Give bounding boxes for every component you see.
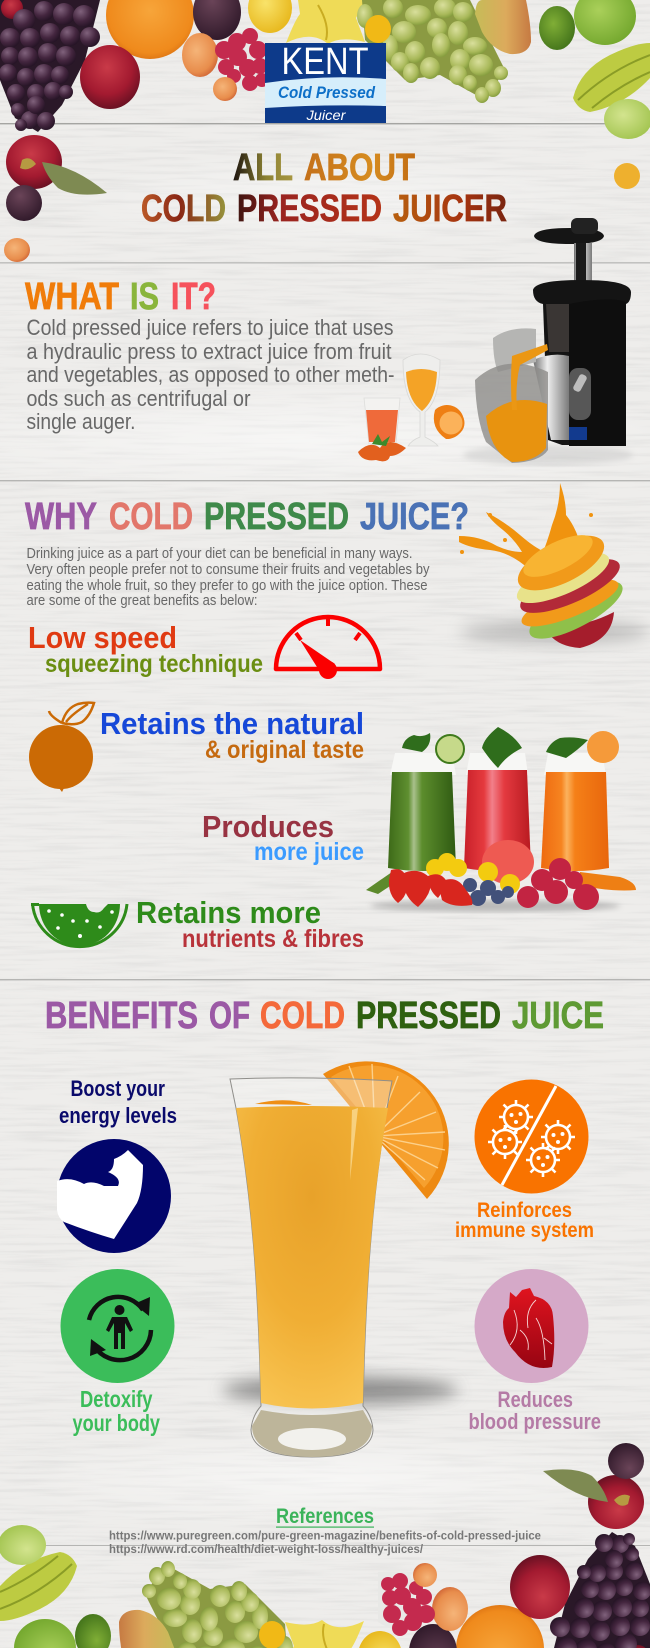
references: https://www.rd.com/health/diet-weight-loss/healthy-juices/ (109, 1544, 424, 1556)
green apple (574, 0, 636, 45)
text: why paragraph: Drinking juice as a part of your diet can be beneficial in many ways. (26, 545, 412, 562)
left red apple, leaf, plum (6, 135, 107, 221)
small apricots (4, 163, 640, 262)
orange wedge (323, 1061, 449, 1199)
heading: benefits: COLD (260, 995, 345, 1037)
references (109, 1505, 541, 1556)
heading: benefits: BENEFITS (45, 995, 198, 1037)
green grapes (357, 0, 508, 103)
item: low speed: squeezing technique (45, 650, 263, 678)
illustration: juicer machine (463, 218, 633, 465)
heading: benefits (45, 995, 604, 1037)
text: why paragraph (26, 545, 430, 609)
plum (193, 0, 241, 40)
label: boost your energy levels: energy levels (59, 1103, 177, 1128)
label: reinforces immune system (455, 1199, 594, 1242)
heading: what is it: WHAT (25, 276, 119, 318)
illustration: juice glasses (358, 354, 464, 461)
pear (475, 0, 531, 54)
illustration: three juice glasses with fruit (366, 727, 636, 912)
lime (539, 6, 575, 50)
item: low speed (28, 620, 263, 678)
references: https://www.puregreen.com/pure-green-magazine/benefits-of-cold-pressed-juice (109, 1530, 541, 1542)
heading: benefits: OF (209, 995, 250, 1037)
heading: benefits: JUICE (512, 995, 604, 1037)
title: ABOUT (304, 147, 415, 189)
dragon fruit (286, 0, 365, 44)
logo: Cold Pressed (278, 83, 376, 102)
heading: why cold pressed juice: WHY (25, 496, 97, 538)
heading: why cold pressed juice: JUICE? (360, 496, 469, 538)
text: what is it paragraph: Cold pressed juice refers to juice that uses (26, 315, 394, 340)
item: retains the natural: & original taste (205, 736, 364, 764)
item: produces: more juice (254, 838, 364, 866)
icon: immune system viruses (474, 1080, 588, 1194)
icon: detox person with arrows (60, 1269, 174, 1383)
orange (106, 0, 194, 59)
title: ALL (233, 147, 293, 189)
lemon (248, 0, 292, 33)
label: boost your energy levels (59, 1076, 177, 1128)
icon: orange fruit (29, 703, 94, 792)
references: References (276, 1505, 374, 1528)
label: detoxify your body: Detoxify (80, 1386, 153, 1412)
item: retains more (136, 895, 364, 953)
text: why paragraph: are some of the great benefits as below: (26, 592, 258, 609)
icon: heart (474, 1269, 588, 1383)
text: what is it paragraph: a hydraulic press to extract juice from fruit (26, 339, 392, 364)
fruit border: top (0, 0, 650, 221)
glass: red juice (464, 727, 531, 871)
logo (265, 41, 386, 123)
title: PRESSED (237, 188, 382, 230)
fruit border: bottom (0, 1443, 650, 1648)
label: reduces blood pressure (468, 1387, 601, 1434)
icon: speedometer (276, 617, 380, 679)
label: detoxify your body: your body (72, 1410, 160, 1436)
label: reduces blood pressure: Reduces (498, 1387, 573, 1412)
apricot (213, 77, 237, 101)
item: retains the natural: Retains the natural (100, 706, 364, 741)
text: what is it paragraph (26, 315, 394, 434)
label: reduces blood pressure: blood pressure (468, 1409, 601, 1434)
illustration: large juice glass with orange (222, 1061, 458, 1457)
item: low speed: Low speed (28, 620, 177, 655)
title (141, 147, 507, 230)
icon: watermelon (31, 903, 127, 947)
text: why paragraph: Very often people prefer not to consume their fruits and vegetables by (26, 561, 430, 578)
star fruit (573, 43, 650, 112)
peach (182, 33, 218, 77)
text: what is it paragraph: and vegetables, as opposed to other meth- (26, 362, 394, 387)
label: boost your energy levels: Boost your (70, 1076, 165, 1101)
heading: what is it (25, 276, 216, 318)
item: produces (202, 809, 364, 866)
illustration: fruit slice stack with splash (459, 483, 650, 649)
heading: why cold pressed juice: COLD (109, 496, 193, 538)
text: what is it paragraph: single auger. (26, 409, 136, 434)
item: produces: Produces (202, 809, 334, 844)
label: detoxify your body (72, 1386, 160, 1436)
heading: what is it: IS (130, 276, 159, 318)
text: why paragraph: eating the whole fruit, so they prefer to go with the juice option. These (26, 577, 428, 594)
glass: orange juice (541, 731, 619, 871)
logo: KENT (282, 41, 368, 83)
fruit pile (366, 840, 636, 910)
title: COLD (141, 188, 226, 230)
item: retains more: nutrients & fibres (182, 925, 364, 953)
icon: flexed arm (57, 1139, 171, 1253)
label: reinforces immune system: Reinforces (477, 1199, 572, 1222)
item: retains the natural (100, 706, 364, 764)
red apple (80, 45, 140, 109)
heading: why cold pressed juice (25, 496, 469, 538)
small yellow plum (365, 15, 391, 43)
label: reinforces immune system: immune system (455, 1219, 594, 1242)
purple grapes (0, 0, 100, 132)
raspberries (215, 28, 272, 92)
light green apple (604, 99, 650, 139)
glass: green juice (388, 733, 464, 871)
heading: why cold pressed juice: PRESSED (204, 496, 349, 538)
title: JUICER (393, 188, 507, 230)
heading: what is it: IT? (171, 276, 216, 318)
logo: Juicer (305, 107, 347, 123)
text: what is it paragraph: ods such as centrifugal or (26, 386, 250, 411)
item: retains more: Retains more (136, 895, 321, 930)
heading: benefits: PRESSED (356, 995, 501, 1037)
